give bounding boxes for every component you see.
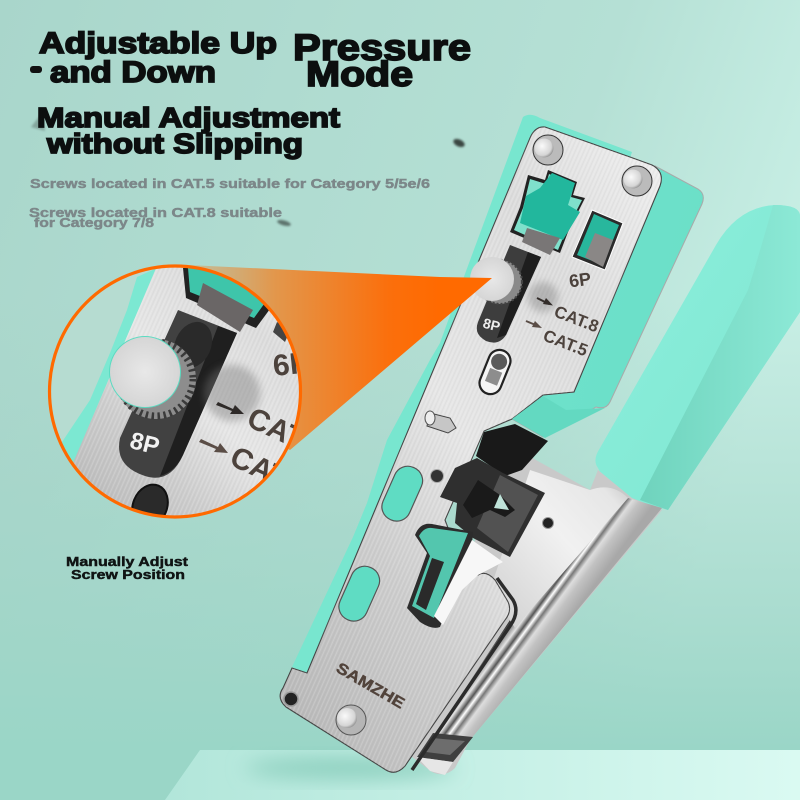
caption: manually adjust: Screw Position [71,567,185,582]
orange magnifier cone [188,265,492,450]
mechanism [440,458,545,557]
top right screw [622,166,652,196]
caption: manually adjust [66,554,189,582]
note: CAT.8 screws: Screws located in CAT.8 suitable [29,205,282,220]
teal notch bar [512,396,605,438]
floor shadow [245,757,455,779]
specks [30,66,466,227]
brushed texture [280,127,661,772]
bottom pin [336,705,366,735]
rear steel frame and rails [412,440,662,775]
zoom: arrow bottom [199,439,228,453]
slot hole [476,347,514,397]
6P window [572,210,623,270]
lower lobe shadow [412,578,516,770]
magnified detail circle [48,264,302,519]
caption: manually adjust: Manually Adjust [66,554,189,569]
label CAT.8: CAT.8 [552,302,601,336]
label CAT.5: CAT.5 [541,326,590,360]
slider [477,245,541,343]
slider: 8P [481,315,502,334]
heading: manual adjustment: Manual Adjustment [37,102,340,133]
zoom: grey block [197,283,253,332]
black mechanism interior [476,424,548,476]
zoom: screw shadow [204,365,260,421]
zoom: slider [119,310,237,478]
knob [470,257,522,304]
floor surface [165,750,800,800]
upper teal oval [377,462,427,526]
screw shadow [528,282,558,312]
heading: pressure mode: Pressure [293,27,471,68]
heading: manual adjustment: without Slipping [46,128,303,159]
zoom: 6P window corner [273,322,287,342]
label 6P: 6P [568,269,592,291]
side pin [425,411,456,433]
arrow to CAT.5 [526,321,542,328]
zoom: CAT.5: CAT.5 [225,440,313,505]
heading: adjustable up and down [39,27,277,89]
heading: pressure mode [293,27,471,94]
arrow to CAT.8 [537,298,553,306]
zoom: steel plate [73,268,299,516]
bottom left screw hole [284,692,298,706]
lower teal oval [334,562,384,626]
small hole [430,470,444,482]
note: CAT.5 screws: Screws located in CAT.5 suitable for Category 5/5e/6 [30,176,430,191]
zoom: oval hole [131,484,169,515]
zoom: 6P: 6P [271,346,311,383]
handle [595,205,800,510]
zoom: CAT.8: CAT.8 [242,401,330,466]
zoom: slider hole [175,322,212,367]
zoom: 8P text: 8P [127,427,162,461]
heading: adjustable up and down: and Down [50,56,216,89]
note: CAT.8 screws: for Category 7/8 [34,215,154,230]
right teal body [512,166,703,437]
note: CAT.8 screws [29,205,282,230]
tool: crimping plier [280,115,800,775]
top socket window [510,170,585,255]
heading: pressure mode: Mode [306,55,413,94]
brand SAMZHE: SAMZHE [333,660,407,712]
front steel plate [280,127,661,772]
zoom: teal window [183,268,269,328]
zoom: knob [109,336,196,419]
crimp slot [407,524,503,628]
zoom: arrow top [216,402,244,414]
left teal edge [292,115,632,673]
heading: manual adjustment [37,102,340,159]
top left screw [533,135,563,165]
heading: adjustable up and down: Adjustable Up [39,27,277,60]
zoom: teal side [62,269,156,462]
